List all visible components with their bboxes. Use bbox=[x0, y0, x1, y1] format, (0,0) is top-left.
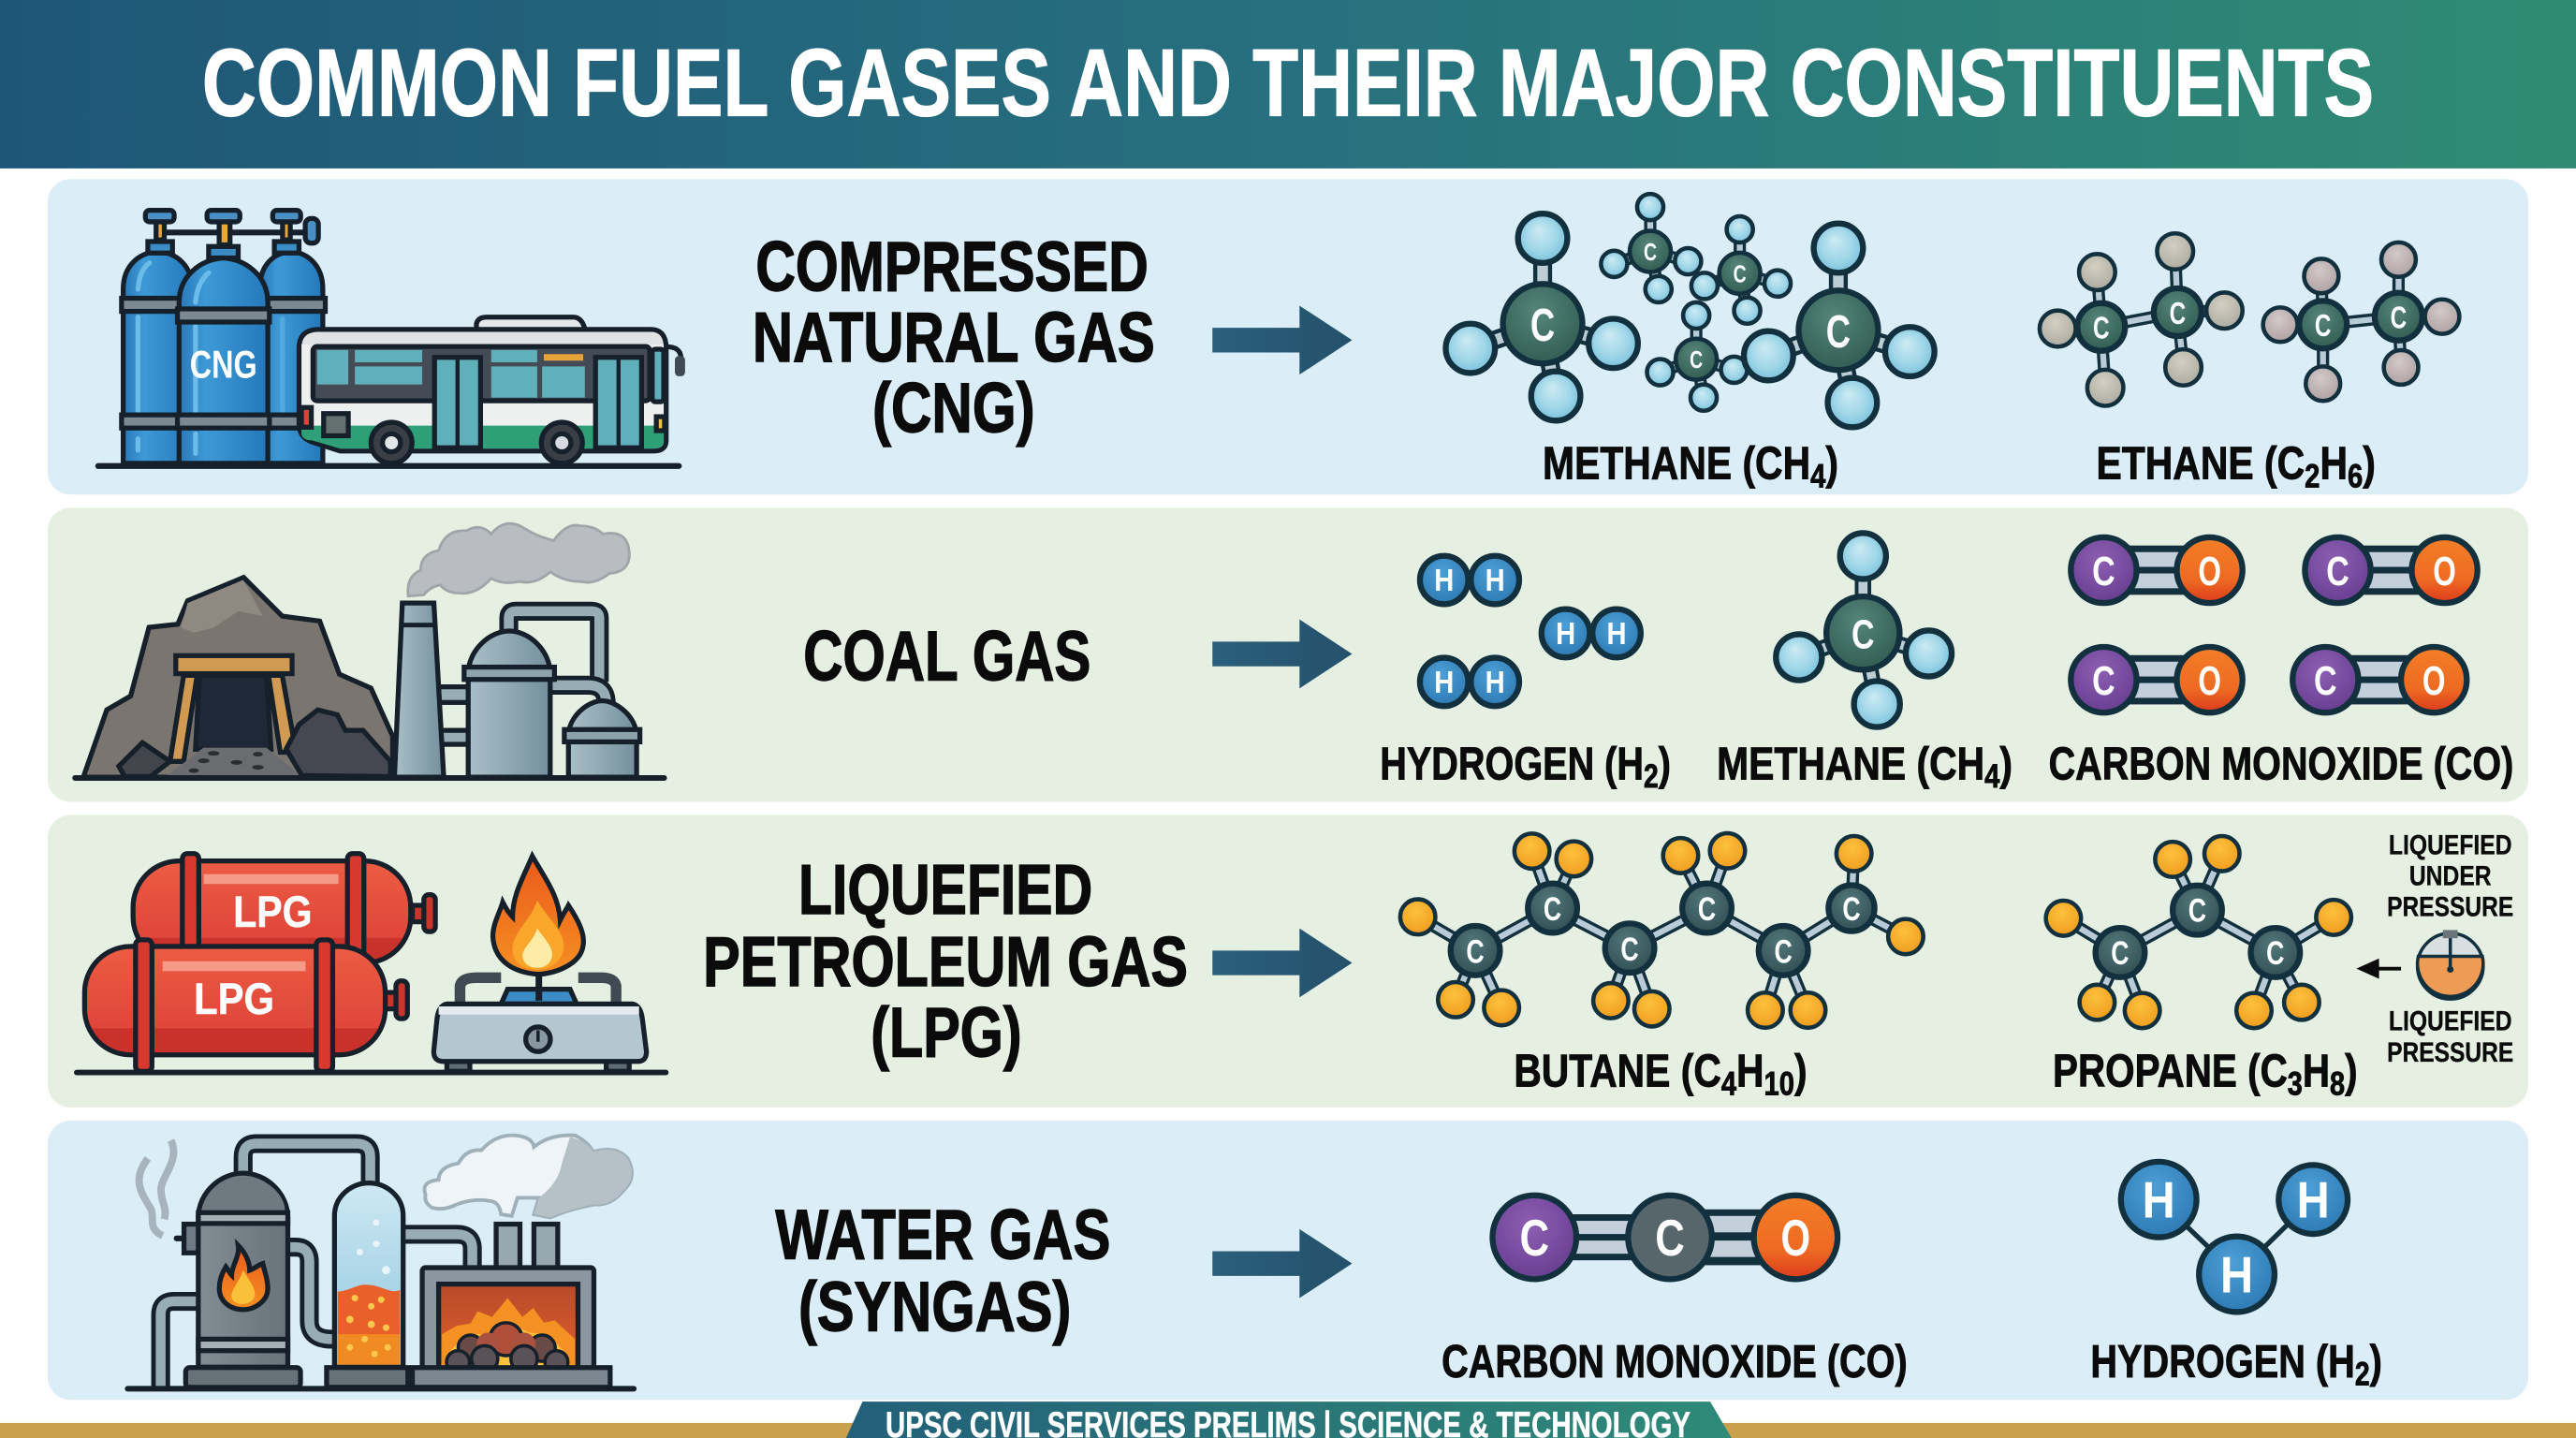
panel heading: LPG: (LPG) bbox=[871, 993, 1022, 1072]
molecule: methane cluster bbox=[1445, 194, 1935, 427]
molecule: carbon monoxide chain bbox=[1493, 1196, 1837, 1279]
molecule: hydrogen: H bbox=[2297, 1172, 2330, 1229]
label: butane: BUTANE (C bbox=[1514, 1047, 1764, 1097]
footer band bbox=[0, 1401, 2576, 1438]
molecule: butane: C bbox=[1842, 891, 1861, 928]
label: hydrogen: HYDROGEN (H bbox=[2090, 1337, 2418, 1387]
panel heading: CNG: (CNG) bbox=[872, 369, 1035, 448]
molecule: butane: C bbox=[1544, 891, 1561, 928]
molecule: butane: C bbox=[1775, 933, 1793, 970]
label: propane: 3 bbox=[2288, 1065, 2303, 1102]
label: methane: 4 bbox=[1984, 758, 2000, 795]
note: liquefied under pressure: LIQUEFIED bbox=[2389, 830, 2512, 861]
label: methane: METHANE (CH bbox=[1543, 439, 1865, 490]
molecule: carbon monoxide group bbox=[2071, 537, 2478, 712]
label: butane: H bbox=[1736, 1047, 1764, 1097]
label: methane: 4 bbox=[1810, 458, 1826, 494]
label: propane: PROPANE (C bbox=[2053, 1047, 2338, 1097]
molecule: hydrogen pairs bbox=[1420, 556, 1641, 706]
label: butane: ) bbox=[1794, 1047, 1808, 1097]
molecule: ethane pair: C bbox=[2391, 301, 2407, 335]
molecule: ethane pair bbox=[2040, 233, 2459, 406]
label: ethane: ) bbox=[2363, 439, 2376, 490]
label: carbon monoxide: CARBON MONOXIDE (CO) bbox=[1442, 1337, 1908, 1387]
molecule: methane cluster: C bbox=[1734, 260, 1747, 288]
label: hydrogen: 2 bbox=[1644, 758, 1659, 795]
label: hydrogen: 2 bbox=[2355, 1357, 2370, 1393]
molecule: carbon monoxide group: C bbox=[2092, 549, 2115, 594]
molecule: hydrogen pairs: H bbox=[1556, 617, 1575, 652]
molecule: carbon monoxide group: C bbox=[2314, 658, 2337, 704]
molecule: butane: C bbox=[1698, 891, 1716, 928]
arrow bbox=[1212, 1229, 1352, 1299]
molecule: butane bbox=[1400, 833, 1924, 1028]
label: propane: ) bbox=[2345, 1047, 2358, 1097]
note: liquefied under pressure bbox=[2387, 830, 2513, 923]
molecule: hydrogen: H bbox=[2220, 1246, 2253, 1303]
panel heading: CNG: COMPRESSED bbox=[755, 227, 1149, 306]
molecule: hydrogen pairs: H bbox=[1486, 666, 1505, 700]
arrow bbox=[1212, 305, 1352, 374]
label: hydrogen: ) bbox=[2370, 1337, 2382, 1387]
molecule: hydrogen: H bbox=[2143, 1172, 2175, 1229]
molecule: methane cluster: C bbox=[1644, 238, 1657, 266]
molecule: ethane pair: C bbox=[2093, 312, 2110, 346]
panel heading: LPG: LIQUEFIED bbox=[798, 850, 1092, 929]
icon: LPG tanks and gas stove bbox=[74, 854, 668, 1076]
icon: pressure vessel with arrow bbox=[2361, 930, 2483, 999]
icon: coal mine and gas plant bbox=[72, 523, 667, 781]
molecule: butane: C bbox=[1466, 933, 1485, 970]
arrow bbox=[1212, 620, 1352, 688]
molecule: carbon monoxide group: C bbox=[2092, 658, 2115, 704]
molecule: carbon monoxide group: C bbox=[2326, 549, 2349, 594]
molecule: carbon monoxide group: O bbox=[2198, 549, 2221, 594]
label: methane: METHANE (CH bbox=[1717, 739, 2039, 789]
label: hydrogen: HYDROGEN (H bbox=[1380, 739, 1707, 789]
label: butane: 4 bbox=[1721, 1065, 1736, 1102]
note: liquefied under pressure: PRESSURE bbox=[2387, 892, 2513, 923]
molecule: hydrogen bbox=[2121, 1162, 2348, 1312]
note: liquefied pressure: PRESSURE bbox=[2387, 1037, 2513, 1068]
panel: coal gas bbox=[48, 507, 2528, 801]
panel heading: CNG: NATURAL GAS bbox=[753, 298, 1155, 376]
panel: water gas bbox=[48, 1121, 2528, 1400]
molecule: ethane pair: C bbox=[2170, 297, 2186, 331]
molecule: carbon monoxide group: O bbox=[2198, 658, 2221, 704]
molecule: hydrogen pairs: H bbox=[1434, 564, 1454, 598]
molecule: carbon monoxide chain: O bbox=[1781, 1210, 1810, 1267]
molecule: carbon monoxide chain: C bbox=[1655, 1210, 1685, 1267]
label: methane: ) bbox=[1999, 739, 2012, 789]
note: liquefied pressure: LIQUEFIED bbox=[2389, 1005, 2512, 1036]
label: hydrogen: ) bbox=[1659, 739, 1671, 789]
panel heading: CNG bbox=[753, 227, 1155, 448]
label: ethane: H bbox=[2320, 439, 2348, 490]
panel: compressed natural gas bbox=[48, 179, 2528, 494]
molecule: carbon monoxide group: O bbox=[2433, 549, 2456, 594]
panel heading: water gas bbox=[775, 1195, 1110, 1346]
molecule: propane: C bbox=[2266, 935, 2284, 972]
molecule: butane: C bbox=[1620, 932, 1639, 968]
panel: liquefied petroleum gas bbox=[48, 815, 2528, 1108]
icon: LPG tanks and gas stove: LPG bbox=[194, 975, 274, 1024]
label: ethane: 6 bbox=[2348, 458, 2363, 494]
panel heading: water gas: WATER GAS bbox=[775, 1195, 1110, 1273]
molecule: ethane pair: C bbox=[2315, 309, 2331, 344]
label: propane: H bbox=[2303, 1047, 2330, 1097]
molecule: hydrogen pairs: H bbox=[1486, 564, 1505, 598]
molecule: methane bbox=[1776, 533, 1952, 727]
molecule: propane: C bbox=[2111, 935, 2130, 972]
header banner bbox=[0, 0, 2576, 169]
panel heading: water gas: (SYNGAS) bbox=[798, 1268, 1071, 1346]
molecule: hydrogen pairs: H bbox=[1434, 666, 1454, 700]
icon: CNG cylinders and bus bbox=[95, 211, 685, 469]
label: ethane: ETHANE (C bbox=[2097, 439, 2347, 490]
icon: water gas plant bbox=[124, 1136, 637, 1391]
molecule: carbon monoxide chain: C bbox=[1519, 1210, 1549, 1267]
molecule: methane: C bbox=[1852, 611, 1875, 657]
panel heading: LPG bbox=[703, 850, 1188, 1072]
molecule: methane cluster: C bbox=[1690, 345, 1703, 374]
label: propane: 8 bbox=[2330, 1065, 2345, 1102]
arrow bbox=[1212, 929, 1352, 997]
icon: LPG tanks and gas stove: LPG bbox=[233, 888, 312, 937]
molecule: hydrogen pairs: H bbox=[1606, 617, 1627, 652]
panel heading: coal gas: COAL GAS bbox=[803, 617, 1090, 696]
molecule: propane bbox=[2046, 836, 2351, 1028]
label: ethane: 2 bbox=[2305, 458, 2320, 494]
note: liquefied under pressure: UNDER bbox=[2409, 860, 2492, 891]
label: butane: 10 bbox=[1764, 1065, 1794, 1102]
icon: CNG cylinders and bus: CNG bbox=[190, 342, 257, 386]
molecule: methane cluster: C bbox=[1530, 301, 1555, 351]
panel heading: LPG: PETROLEUM GAS bbox=[703, 922, 1188, 1001]
label: methane: ) bbox=[1825, 439, 1838, 490]
molecule: carbon monoxide group: O bbox=[2422, 658, 2445, 704]
molecule: methane cluster: C bbox=[1826, 307, 1851, 358]
molecule: propane: C bbox=[2188, 893, 2206, 930]
note: liquefied pressure bbox=[2387, 1005, 2513, 1068]
